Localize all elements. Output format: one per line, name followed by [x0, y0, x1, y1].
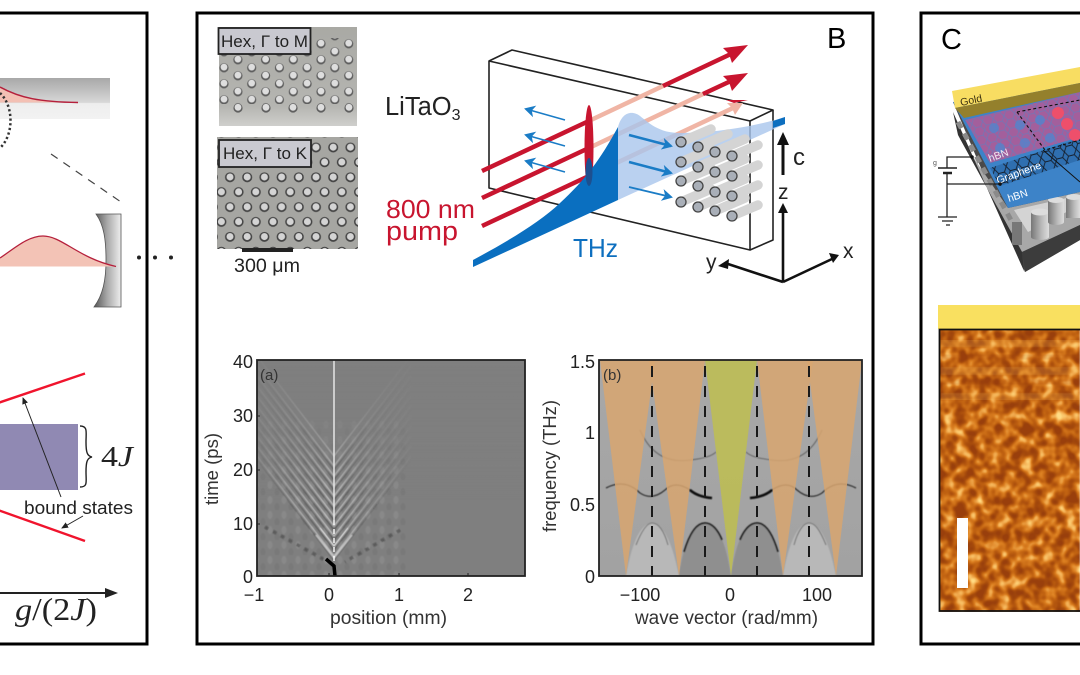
xyz axes: y	[706, 251, 717, 274]
chart (b): frequency vs wave vector: wave vector (rad/mm)	[634, 608, 818, 629]
panel C frame	[921, 13, 1080, 644]
chart (b): frequency vs wave vector: 1.5	[570, 352, 595, 372]
chart (a): time vs position: position (mm)	[330, 608, 447, 629]
brace 4J: 4J	[101, 442, 135, 473]
x axis arrow with label: g/(2J)	[15, 591, 97, 627]
panel A frame	[0, 13, 147, 644]
chart (b): frequency vs wave vector: 0	[585, 567, 595, 587]
chart (a): time vs position: −1	[244, 585, 264, 605]
chart (a): time vs position: 2	[463, 585, 473, 605]
gold bar above map	[938, 305, 1080, 329]
chart (b): frequency vs wave vector: (b)	[603, 367, 621, 384]
pillar array rods	[681, 129, 758, 216]
heat map	[939, 329, 1080, 612]
cylinder waveguide with decaying mode	[0, 78, 110, 119]
chart (a): time vs position: time (ps)	[201, 433, 222, 505]
chart (a): time vs position: 0	[243, 567, 253, 587]
c axis arrow: c	[793, 144, 805, 171]
chart (b): frequency vs wave vector: −100	[620, 585, 660, 605]
blue hBN layer	[953, 80, 1080, 208]
xyz axes: z	[778, 181, 788, 204]
c axis arrow	[777, 132, 805, 175]
chart (b): frequency vs wave vector: 0.5	[570, 495, 595, 515]
layer labels: hBN	[987, 147, 1010, 165]
red pump beams	[482, 45, 748, 226]
layer labels: Gold	[959, 93, 983, 109]
chart (a): time vs position: 1	[394, 585, 404, 605]
focusing lens	[584, 105, 594, 191]
dashed zoom line	[51, 154, 121, 202]
panel: B	[197, 13, 873, 644]
bound states callout	[23, 398, 133, 528]
chart (a): time vs position: 0	[324, 585, 334, 605]
micrograph: hex gamma to M	[218, 27, 357, 126]
chart (b): frequency vs wave vector: 0	[725, 585, 735, 605]
chart (b): frequency vs wave vector: frequency (THz)	[539, 400, 560, 532]
blue propagation arrows	[526, 109, 671, 197]
mirror	[94, 214, 121, 307]
layer labels: hBN	[1006, 187, 1029, 205]
chart (b): frequency vs wave vector: 1	[585, 423, 595, 443]
panel letter B: B	[827, 23, 846, 55]
chart (a): time vs position: 30	[233, 406, 253, 426]
substrate	[953, 102, 1080, 272]
pillars	[1012, 194, 1080, 245]
xyz axes	[706, 181, 854, 282]
dashed region	[1017, 100, 1080, 150]
pump label: pump	[386, 216, 458, 246]
x axis arrow with label	[0, 588, 118, 627]
panel letter C: C	[941, 24, 962, 56]
gaussian cavity mode	[0, 236, 116, 266]
ellipsis dots	[137, 256, 173, 260]
pump label	[386, 194, 475, 246]
gate circuit: g	[933, 160, 937, 167]
panel: C	[921, 13, 1080, 644]
panel B frame	[197, 13, 873, 644]
layer labels: Graphene	[995, 160, 1043, 187]
chart (a): time vs position: (a)	[260, 367, 278, 384]
brace 4J	[80, 426, 135, 487]
chart (a): time vs position	[201, 352, 525, 629]
chart (b): frequency vs wave vector: 100	[802, 585, 832, 605]
gold contact	[952, 67, 1080, 108]
THz label: THz	[573, 233, 618, 263]
chart (a): time vs position: 10	[233, 514, 253, 534]
layer labels	[959, 93, 1043, 205]
bound states callout: bound states	[24, 497, 133, 518]
chart (a): time vs position: 40	[233, 352, 253, 372]
dark blue THz pulse	[473, 127, 618, 267]
micrograph: hex gamma to K	[217, 137, 358, 249]
panel: A	[0, 13, 173, 644]
dotted circle	[0, 93, 10, 148]
material label LiTaO3: 3	[452, 107, 461, 124]
bound state lines	[0, 374, 85, 541]
band rectangle	[0, 424, 78, 490]
chart (b): frequency vs wave vector	[539, 352, 862, 629]
white scale bar	[957, 518, 968, 588]
device stack illustration	[952, 67, 1080, 272]
micrograph: hex gamma to M: Hex, Γ to M	[221, 32, 308, 51]
micrograph: hex gamma to K: Hex, Γ to K	[223, 144, 308, 163]
pillar holes	[676, 137, 737, 221]
xyz axes: x	[843, 240, 854, 263]
gate circuit	[933, 155, 1002, 225]
graphene layer	[990, 138, 1080, 186]
crystal slab	[489, 50, 773, 250]
light blue THz sheet	[618, 113, 785, 200]
pump label: 800 nm	[386, 194, 475, 224]
chart (a): time vs position: 20	[233, 460, 253, 480]
scale bar 300 um: 300 μm	[234, 255, 300, 277]
purple moire layer	[965, 92, 1080, 163]
material label LiTaO3: LiTaO	[385, 93, 452, 121]
